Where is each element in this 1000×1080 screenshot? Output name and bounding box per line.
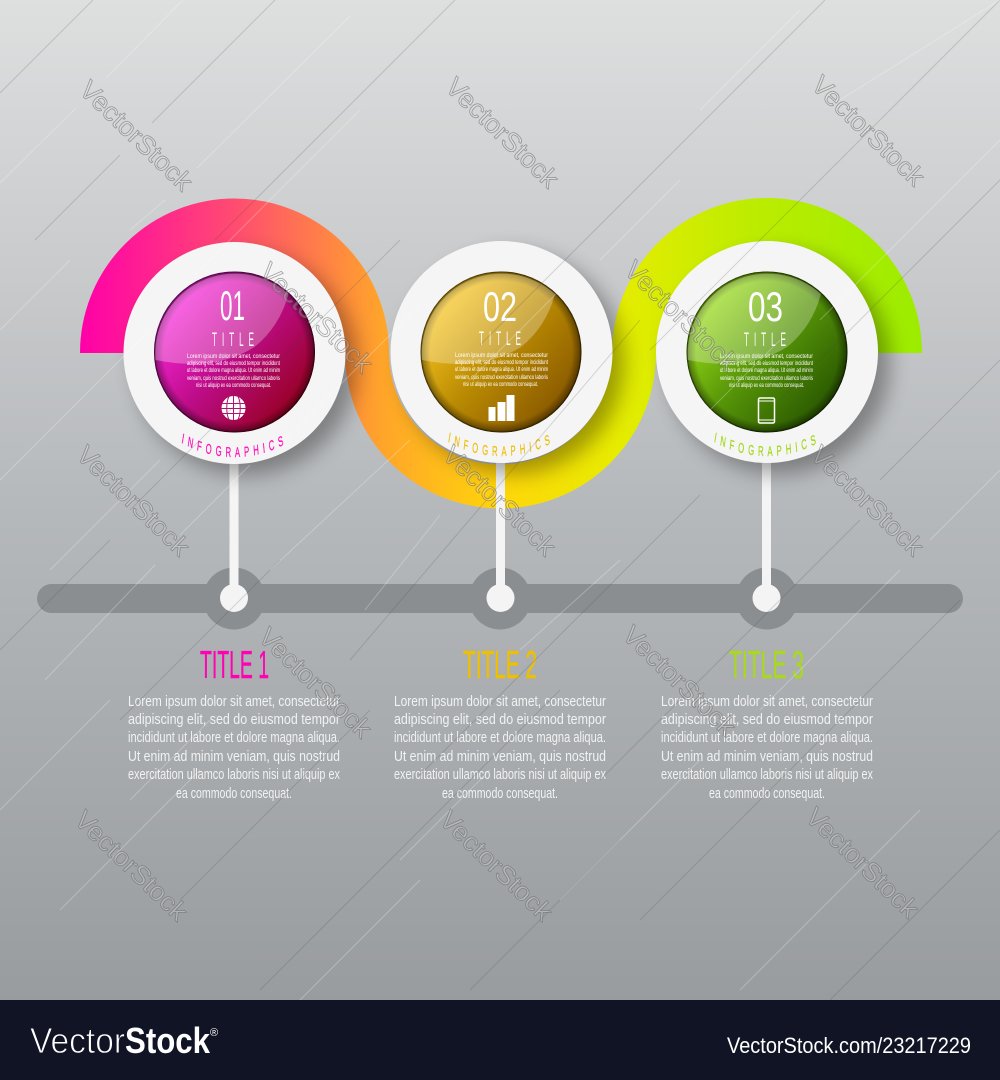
text block 2: Ut enim ad minim veniam, quis nostrud	[394, 748, 606, 765]
footer url: VectorStock.com/23217229	[727, 1033, 971, 1058]
watermarks: VectorStock	[253, 621, 379, 744]
icon: globe	[222, 396, 246, 420]
footer logo: ®	[210, 1027, 218, 1039]
icon: bar chart	[488, 395, 514, 421]
text block 1: Ut enim ad minim veniam, quis nostrud	[128, 748, 340, 765]
watermarks: VectorStock	[800, 801, 926, 924]
badge text: adipiscing elit, sed do eiusmod tempor incididunt	[455, 359, 548, 366]
curved label: INFOGRAPHICS	[182, 434, 284, 458]
watermarks: VectorStock	[805, 439, 931, 562]
badge text	[720, 353, 813, 389]
badge text: adipiscing elit, sed do eiusmod tempor incididunt	[720, 360, 813, 367]
text block 1: adipiscing elit, sed do eiusmod tempor	[128, 711, 340, 728]
badge text: Lorem ipsum dolor sit amet, consectetur	[455, 352, 548, 359]
watermarks: VectorStock	[806, 69, 932, 192]
badge text: nisi ut aliquip ex ea commodo consequat.	[463, 381, 538, 388]
badge text: veniam, quis nostrud exercitation ullamco laboris	[187, 375, 280, 382]
label title: TITLE	[744, 330, 786, 351]
text block 2: ea commodo consequat.	[442, 785, 558, 802]
text block 1: exercitation ullamco laboris nisi ut aliquip ex	[128, 766, 340, 783]
text block 3: exercitation ullamco laboris nisi ut aliquip ex	[661, 766, 873, 783]
watermarks: VectorStock	[434, 804, 560, 927]
curved label: INFOGRAPHICS	[448, 432, 550, 456]
text block 2	[394, 693, 606, 802]
badge 2	[390, 240, 636, 486]
text block 2: Lorem ipsum dolor sit amet, consectetur	[394, 693, 606, 710]
badge text	[455, 352, 548, 388]
text block 1	[128, 693, 340, 802]
heading: title 2: TITLE 2	[463, 644, 537, 687]
number 01: 01	[220, 282, 245, 329]
text block 3	[661, 693, 873, 802]
text block 2: adipiscing elit, sed do eiusmod tempor	[394, 711, 606, 728]
number 03: 03	[748, 283, 783, 330]
text block 1: Lorem ipsum dolor sit amet, consectetur	[128, 693, 340, 710]
timeline bar	[37, 568, 963, 630]
watermarks: VectorStock	[619, 254, 745, 377]
watermarks: VectorStock	[440, 71, 566, 194]
badge text: veniam, quis nostrud exercitation ullamco laboris	[455, 374, 548, 381]
badge text: nisi ut aliquip ex ea commodo consequat.	[729, 382, 804, 389]
text block 3: ea commodo consequat.	[709, 785, 825, 802]
step 2 stem	[486, 455, 514, 612]
text block 3: Lorem ipsum dolor sit amet, consectetur	[661, 693, 873, 710]
text block 3: Ut enim ad minim veniam, quis nostrud	[661, 748, 873, 765]
step 3 stem	[752, 455, 780, 612]
badge text	[187, 353, 280, 389]
badge text: Lorem ipsum dolor sit amet, consectetur	[720, 353, 813, 360]
watermarks: VectorStock	[617, 619, 743, 742]
text block 2: incididunt ut labore et dolore magna aliqua.	[394, 729, 606, 746]
step 1 stem	[220, 455, 248, 612]
text block 1: incididunt ut labore et dolore magna aliqua.	[128, 729, 340, 746]
badge 3	[656, 240, 902, 486]
footer bar	[0, 1000, 1000, 1080]
watermarks: VectorStock	[74, 74, 200, 197]
text block 2: exercitation ullamco laboris nisi ut aliquip ex	[394, 766, 606, 783]
badge text: Lorem ipsum dolor sit amet, consectetur	[187, 353, 280, 360]
number 02: 02	[483, 283, 517, 330]
badge text: ut labore et dolore magna aliqua. Ut enim ad minim	[720, 367, 813, 374]
watermarks: VectorStock	[437, 439, 563, 562]
badge 1	[124, 241, 369, 486]
badge text: ut labore et dolore magna aliqua. Ut enim ad minim	[455, 366, 548, 373]
curved label: INFOGRAPHICS	[714, 432, 816, 456]
watermarks: VectorStock	[71, 439, 197, 562]
text block 1: ea commodo consequat.	[176, 785, 292, 802]
badge text: adipiscing elit, sed do eiusmod tempor incididunt	[187, 360, 280, 367]
watermarks: VectorStock	[69, 804, 195, 927]
badge text: ut labore et dolore magna aliqua. Ut enim ad minim	[187, 367, 280, 374]
wave ribbon	[102, 220, 900, 486]
watermarks	[69, 69, 932, 927]
label title: TITLE	[479, 329, 521, 350]
icon: phone	[758, 398, 774, 423]
badge text: nisi ut aliquip ex ea commodo consequat.	[196, 382, 271, 389]
heading: title 3: TITLE 3	[729, 644, 804, 687]
badge text: veniam, quis nostrud exercitation ullamco laboris	[720, 375, 813, 382]
text block 3: incididunt ut labore et dolore magna aliqua.	[661, 729, 873, 746]
footer logo: VectorStock	[30, 1020, 223, 1061]
label title: TITLE	[212, 330, 254, 351]
text block 3: adipiscing elit, sed do eiusmod tempor	[661, 711, 873, 728]
watermarks: VectorStock	[254, 256, 380, 379]
text: TITLE 1	[200, 644, 269, 687]
